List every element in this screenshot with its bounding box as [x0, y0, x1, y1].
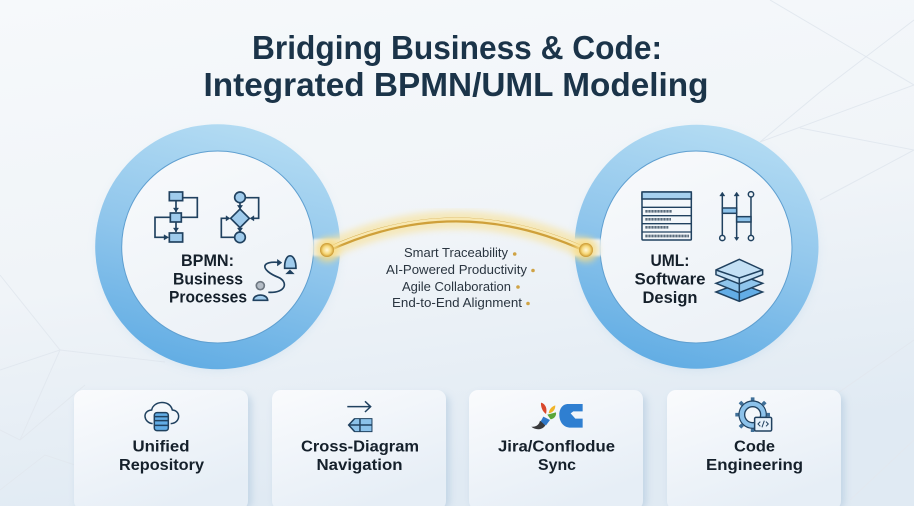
label [706, 438, 803, 474]
icon: cloud database [145, 402, 179, 431]
card: Unified Repository [74, 390, 252, 506]
label [301, 438, 419, 474]
card: Code Engineering [667, 390, 845, 506]
icon: process flowchart [155, 192, 197, 242]
label: BPMN Business Processes [169, 251, 247, 306]
label: Jira/Conflodue [498, 438, 615, 456]
icon: colourful brush and C logo [531, 403, 583, 429]
label: Sync [538, 457, 576, 474]
label: Code [734, 438, 775, 456]
right node [574, 238, 598, 262]
label: BPMN Business Processes: Processes [169, 288, 247, 306]
label: Engineering [706, 457, 803, 474]
card: Cross-Diagram Navigation [272, 390, 450, 506]
benefits list: Smart Traceability [404, 245, 508, 260]
label: UML Software Design: Design [642, 288, 698, 307]
label: UML Software Design: UML: [650, 251, 690, 270]
icon: gateway flowchart [221, 192, 259, 243]
icon: sequence diagram [720, 192, 754, 241]
benefits list: AI-Powered Productivity [386, 262, 527, 277]
icon: class table [642, 192, 691, 240]
left node [315, 238, 339, 262]
card: Jira/Conflodue Sync [469, 390, 647, 506]
title: Integrated BPMN/UML Modeling [204, 66, 708, 103]
benefits list: End-to-End Alignment [392, 295, 522, 310]
ring notch at connector [572, 239, 601, 256]
benefits list [386, 245, 535, 310]
label: UML Software Design [634, 251, 706, 307]
icon: navigation arrows [347, 401, 372, 432]
benefits list: Agile Collaboration [402, 279, 511, 294]
label: Navigation [316, 457, 402, 474]
icon: user journey to bell [253, 256, 296, 300]
label [498, 438, 615, 474]
icon: layered stack [716, 259, 763, 301]
icon: gear with code [735, 397, 772, 432]
label: Repository [119, 457, 204, 474]
title [204, 29, 708, 103]
label: Cross-Diagram [301, 438, 419, 456]
right circle: UML [572, 125, 818, 369]
label: Unified [132, 438, 190, 456]
title: Bridging Business & Code: [252, 29, 662, 66]
left circle: BPMN [95, 124, 343, 369]
label: BPMN Business Processes: Business [173, 270, 243, 288]
label [119, 438, 204, 474]
golden connector arc [315, 219, 598, 262]
ring notch at connector [313, 239, 343, 256]
label: BPMN Business Processes: BPMN: [181, 251, 234, 270]
label: UML Software Design: Software [634, 270, 706, 288]
